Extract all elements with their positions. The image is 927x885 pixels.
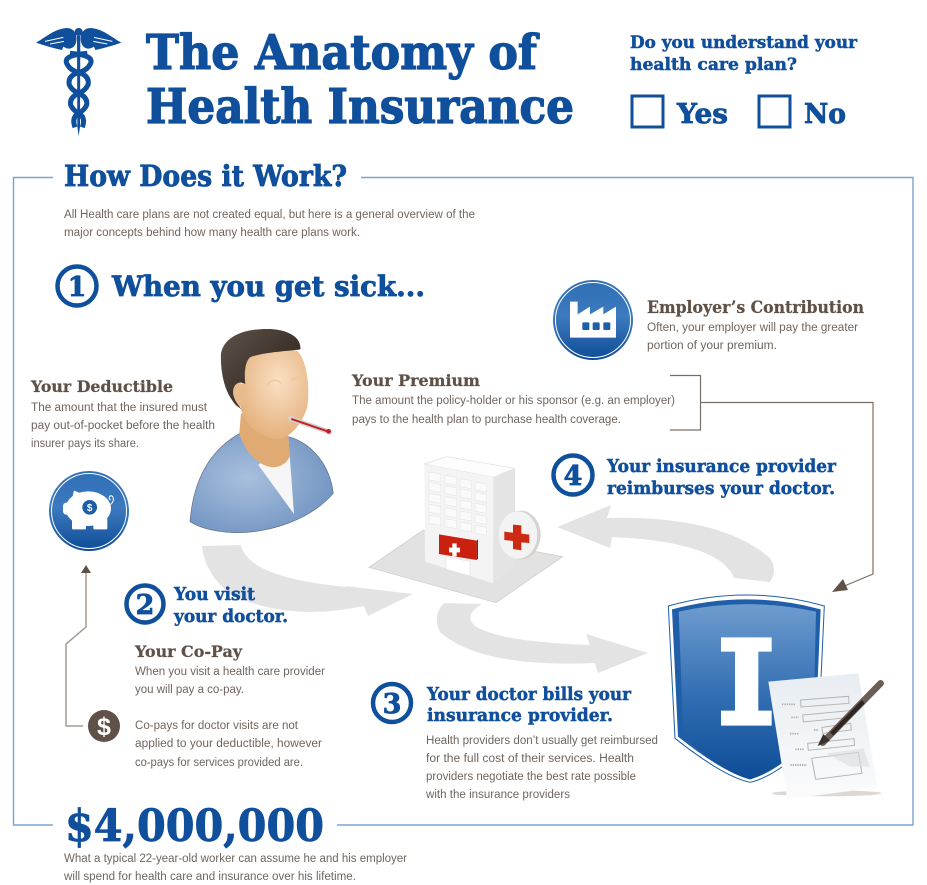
your premium: Your Premium bbox=[351, 371, 480, 390]
icon: dollar coin bbox=[88, 710, 120, 742]
lifetime cost text: will spend for health care and insurance over his lifetime. bbox=[63, 871, 356, 883]
lifetime cost text bbox=[63, 853, 407, 883]
intro text: All Health care plans are not created equal, but here is a general overview of the bbox=[64, 209, 475, 221]
icon: sick person bbox=[190, 329, 333, 533]
your deductible: insurer pays its share. bbox=[31, 438, 139, 450]
icon: piggy bank badge bbox=[49, 471, 129, 551]
intro text bbox=[64, 209, 475, 239]
icon: dollar coin: $ bbox=[97, 713, 111, 741]
step 2 heading bbox=[126, 584, 288, 627]
employer's contribution: Employer’s Contribution bbox=[647, 298, 864, 318]
step 3 text: for the full cost of their services. Health bbox=[426, 753, 634, 765]
your deductible: pay out-of-pocket before the health bbox=[31, 420, 215, 432]
title: The Anatomy of bbox=[146, 25, 540, 81]
your co-pay: When you visit a health care provider bbox=[135, 666, 325, 678]
your deductible bbox=[30, 377, 215, 450]
step 3 heading: Your doctor bills your bbox=[426, 684, 631, 705]
icon: insurance shield with form bbox=[668, 595, 882, 799]
step 4 heading: reimburses your doctor. bbox=[607, 478, 835, 499]
step 2 heading: your doctor. bbox=[173, 606, 288, 627]
question: do you understand your plan: health care plan? bbox=[630, 55, 797, 75]
lifetime cost text: What a typical 22-year-old worker can assume he and his employer bbox=[64, 853, 407, 865]
title bbox=[146, 25, 574, 135]
question: do you understand your plan: No bbox=[804, 99, 846, 130]
employer's contribution: Often, your employer will pay the greater bbox=[647, 322, 858, 334]
arrow: gray to hospital bbox=[202, 545, 413, 616]
icon: factory badge bbox=[553, 280, 633, 360]
your co-pay bbox=[134, 642, 325, 769]
your deductible: Your Deductible bbox=[30, 377, 173, 396]
your co-pay: applied to your deductible, however bbox=[135, 738, 322, 750]
employer's contribution: portion of your premium. bbox=[647, 340, 777, 352]
arrow: premium to insurer bbox=[670, 376, 873, 592]
your premium bbox=[351, 371, 675, 426]
icon: caduceus bbox=[36, 28, 121, 136]
arrow: gray to insurer bbox=[437, 603, 648, 673]
step 3 heading bbox=[373, 684, 631, 726]
step 4 heading: Your insurance provider bbox=[606, 456, 836, 477]
step 3 heading: insurance provider. bbox=[427, 705, 613, 726]
your co-pay: co-pays for services provided are. bbox=[135, 757, 303, 769]
step 3 text: providers negotiate the best rate possible bbox=[426, 771, 636, 783]
employer's contribution bbox=[647, 298, 864, 352]
step 3 heading: 3 bbox=[383, 689, 401, 720]
your co-pay: Co-pays for doctor visits are not bbox=[135, 720, 299, 732]
step 3 text: Health providers don’t usually get reimbursed bbox=[426, 735, 658, 747]
intro text: major concepts behind how many health care plans work. bbox=[64, 227, 360, 239]
step 3 text bbox=[425, 735, 658, 801]
arrow: gray to doctor bbox=[557, 505, 774, 582]
question: do you understand your plan bbox=[630, 33, 858, 130]
title: Health Insurance bbox=[146, 79, 574, 135]
your deductible: The amount that the insured must bbox=[31, 402, 208, 414]
step 4 heading bbox=[554, 456, 836, 499]
arrow: co-pay to deductible bbox=[66, 565, 91, 726]
step 2 heading: 2 bbox=[136, 590, 154, 621]
your co-pay: Your Co-Pay bbox=[134, 642, 243, 661]
your co-pay: you will pay a co-pay. bbox=[135, 684, 244, 696]
question: do you understand your plan: Do you understand your bbox=[630, 33, 858, 53]
step 1 heading: 1 bbox=[68, 272, 86, 303]
your premium: The amount the policy-holder or his sponsor (e.g. an employer) bbox=[352, 395, 675, 407]
your premium: pays to the health plan to purchase health coverage. bbox=[352, 414, 621, 426]
step 3 text: with the insurance providers bbox=[425, 789, 570, 801]
step 4 heading: 4 bbox=[564, 461, 582, 492]
step 2 heading: You visit bbox=[173, 584, 256, 605]
icon: piggy bank badge: $ bbox=[87, 503, 93, 514]
step 1 heading: When you get sick... bbox=[111, 270, 425, 303]
heading: how does it work: How Does it Work? bbox=[64, 159, 347, 193]
question: do you understand your plan: Yes bbox=[676, 99, 728, 130]
icon: hospital bbox=[369, 457, 563, 603]
big number: $4,000,000: $4,000,000 bbox=[65, 801, 324, 852]
